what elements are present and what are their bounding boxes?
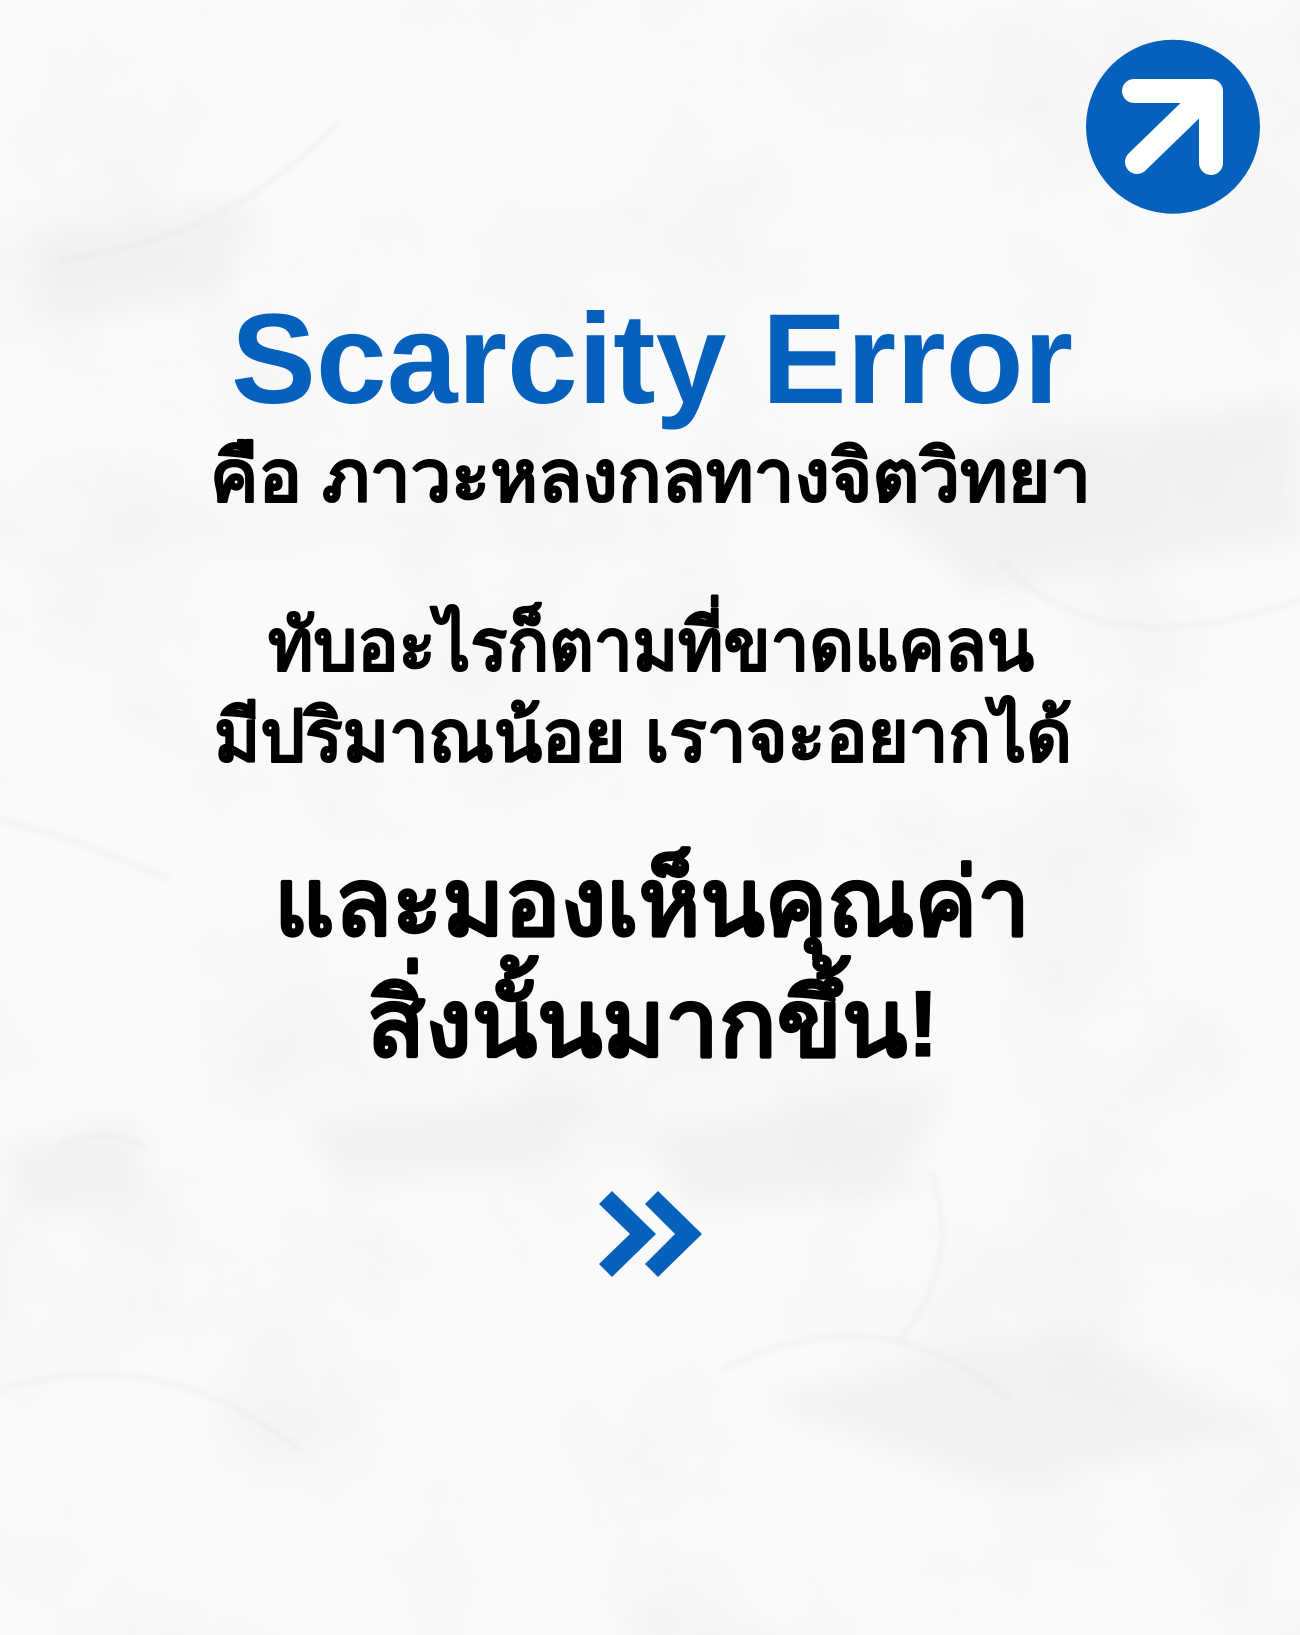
emphasis text: สิ่งนั้นมากขึ้น! [367,954,939,1076]
logo: blue circle with white arrow [1086,40,1260,214]
emphasis text: และมองเห็นคุณค่า [274,845,1030,961]
emphasis text [274,845,1030,1076]
explanation text [214,594,1072,777]
explanation text: มีปริมาณน้อย เราจะอยากได้ [214,694,1072,777]
explanation text: ทับอะไรก็ตามที่ขาดแคลน [268,594,1034,686]
icon: double chevron arrow [599,1191,702,1277]
title: Scarcity Error [231,288,1073,431]
definition line: คือ ภาวะหลงกลทางจิตวิทยา [210,437,1091,517]
